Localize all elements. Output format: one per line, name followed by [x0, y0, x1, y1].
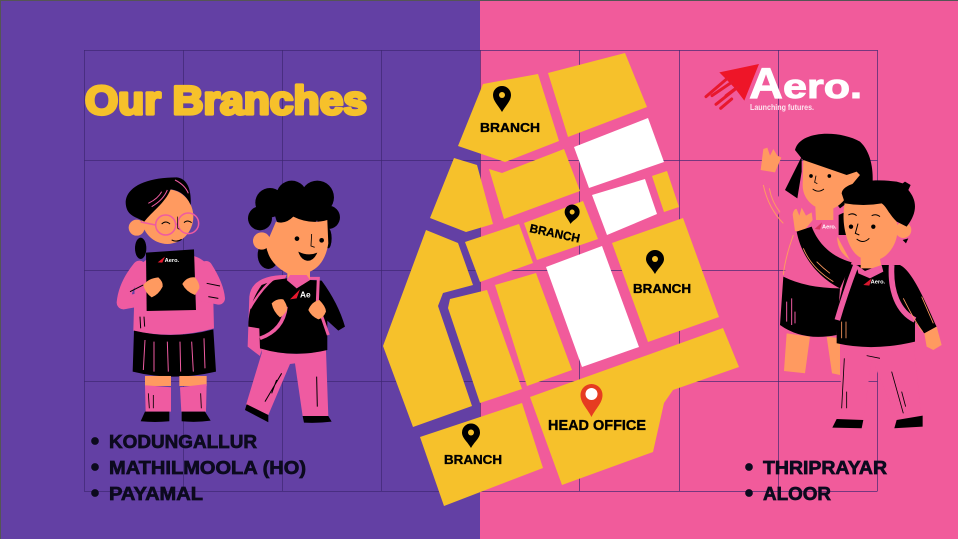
label: branch centre: BRANCH	[528, 221, 581, 246]
character: girl with binder: Aero.	[165, 258, 180, 264]
branch list: right: ALOOR	[763, 483, 831, 504]
logo: Aero: A	[749, 59, 783, 108]
branch list: left: PAYAMAL	[109, 483, 203, 504]
character: boy waving	[793, 180, 942, 428]
branch list: left: MATHILMOOLA (HO)	[109, 457, 306, 478]
label: branch south: BRANCH	[444, 452, 502, 467]
label: head office: HEAD OFFICE	[548, 418, 646, 434]
character: boy waving: Aero.	[871, 280, 886, 286]
logo: Aero	[706, 59, 862, 112]
pin: branch north	[493, 86, 511, 112]
character: girl waving: Aero.	[822, 224, 837, 230]
character: girl waving	[761, 134, 873, 375]
character: boy with backpack	[245, 181, 345, 423]
label: branch north: BRANCH	[480, 120, 540, 135]
logo: Aero: ero.	[783, 68, 862, 106]
icon: red arrow	[706, 64, 759, 108]
map	[383, 53, 739, 506]
branch list: right: THRIPRAYAR	[763, 457, 887, 478]
branch list: right	[746, 457, 887, 504]
logo: Aero: Launching futures.	[750, 102, 814, 112]
pin: branch south	[462, 424, 480, 448]
character: boy with backpack: Ae	[300, 289, 311, 299]
label: branch east: BRANCH	[633, 281, 691, 296]
pin: head office	[580, 384, 602, 417]
pin: branch centre	[563, 204, 581, 225]
title: Our Branches	[85, 79, 367, 123]
branch list: left: KODUNGALLUR	[109, 431, 257, 452]
pin: branch east	[646, 250, 664, 274]
branch list: left	[92, 431, 306, 504]
character: girl with binder	[123, 177, 220, 422]
